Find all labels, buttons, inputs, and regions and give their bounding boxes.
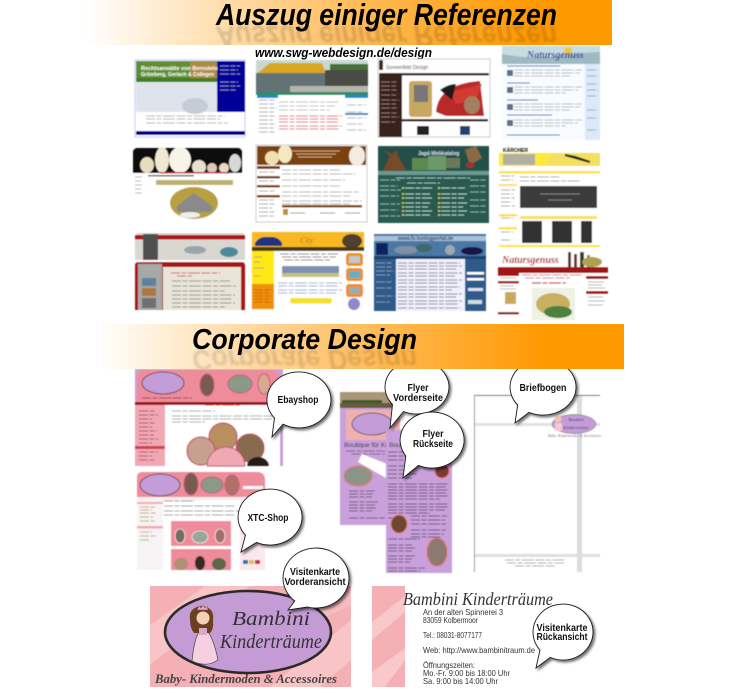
panel: Briefbogen letterhead: Baby- Kindermoden & Accessoires <box>548 434 602 438</box>
panel: business card back <box>372 586 553 687</box>
heading banner: Corporate Design <box>110 324 624 369</box>
address and opening hours: Mo.-Fr. 9:00 bis 18:00 Uhr <box>423 668 510 678</box>
screenshot: law firm site <box>135 60 245 137</box>
panel: flyer front side: Boutique für Kinder <box>344 442 400 449</box>
panel: Briefbogen letterhead: Bambini <box>568 417 584 422</box>
screenshot: design shop with phone and feathers: Sonnenfeld Design <box>386 65 428 71</box>
screenshot: blue tuning portal <box>374 234 486 311</box>
tagline: Baby- Kindermoden & Accessoires <box>154 671 337 686</box>
callout: Flyer Rückseite <box>400 412 464 478</box>
address and opening hours: Tel.: 08031-8077177 <box>423 630 482 640</box>
address and opening hours: Web: http://www.bambinitraum.de <box>423 645 535 655</box>
screenshot: Natursgenuss red shop <box>498 250 608 320</box>
screenshot: Natursgenuss blog: Natursgenuss <box>526 50 584 61</box>
callout: XTC-Shop <box>238 489 302 552</box>
panel: flyer front side <box>340 392 400 525</box>
logo text <box>219 608 322 653</box>
card name: Bambini Kinderträume <box>403 589 553 609</box>
panel: XTC-Shop screenshot <box>137 472 265 570</box>
screenshot: yellow holiday site: City <box>300 236 314 245</box>
callout: Visitenkarte Vorderansicht <box>283 548 349 610</box>
reference screenshots grid <box>133 46 608 320</box>
header banner: Auszug einiger Referenzen: Auszug einiger Referenzen <box>215 19 557 54</box>
logo text: Bambini <box>232 608 310 630</box>
screenshot: Natursgenuss blog <box>502 46 600 140</box>
address and opening hours <box>423 607 535 686</box>
panel: flyer back side <box>386 430 452 573</box>
screenshot: design shop with phone and feathers <box>378 59 490 137</box>
callout: Flyer Vorderseite <box>385 360 449 428</box>
heading text: Corporate Design <box>192 324 417 356</box>
callout: Ebayshop <box>267 372 331 437</box>
panel: Ebayshop screenshot <box>135 369 283 466</box>
screenshot: dog breeder with black header <box>133 147 242 223</box>
screenshot: Natursgenuss red shop: Natursgenuss <box>501 255 559 266</box>
callout: Flyer Vorderseite: Flyer <box>408 382 428 394</box>
panel: Briefbogen letterhead: Kinderträume <box>562 425 589 430</box>
panel: business card front <box>150 586 351 687</box>
callout: Flyer Rückseite: Rückseite <box>413 438 453 450</box>
icon: princess girl <box>190 605 218 664</box>
screenshot: law firm site: Rechtsanwälte von Bernstein <box>141 66 218 72</box>
address and opening hours: Öffnungszeiten: <box>423 660 475 670</box>
address and opening hours: 83059 Kolbermoor <box>423 615 478 625</box>
screenshot: dog breeder with brown header <box>256 145 367 222</box>
infographic page <box>98 0 624 687</box>
callout: Visitenkarte Rückansicht: Rückansicht <box>536 631 588 643</box>
callout: Flyer Rückseite: Flyer <box>422 428 444 440</box>
header banner: Auszug einiger Referenzen <box>98 0 612 45</box>
screenshot: hunting site green <box>378 146 489 223</box>
callout: XTC-Shop: XTC-Shop <box>248 512 288 524</box>
address and opening hours: Sa. 9:00 bis 14:00 Uhr <box>423 676 498 686</box>
website url: www.swg-webdesign.de/design <box>255 46 432 60</box>
address and opening hours: An der alten Spinnerei 3 <box>423 607 503 617</box>
screenshot: company site with building <box>256 60 368 137</box>
heading banner: Corporate Design: Corporate Design <box>192 343 417 375</box>
screenshot: Kärcher shop <box>499 147 600 247</box>
screenshot: law firm site: Grömberg, Gerlach & Collegen <box>141 72 214 78</box>
callout: Briefbogen <box>510 359 576 423</box>
screenshot: Kärcher shop: KÄRCHER <box>503 147 528 154</box>
logo text: Kinderträume <box>219 631 322 653</box>
screenshot: hunting site green: Jagd-Webkatalog <box>418 151 459 157</box>
callout: Visitenkarte Rückansicht: Visitenkarte <box>536 622 588 634</box>
logo oval <box>165 591 331 673</box>
callout: Ebayshop: Ebayshop <box>278 394 318 406</box>
screenshot: yellow holiday site <box>252 232 364 310</box>
panel: Briefbogen letterhead <box>474 395 602 572</box>
callout: Visitenkarte Vorderansicht: Visitenkarte <box>290 566 340 578</box>
panel: flyer back side: Boutique für Kinder <box>389 442 445 449</box>
callout: Flyer Vorderseite: Vorderseite <box>393 392 443 404</box>
callout: Briefbogen: Briefbogen <box>520 382 566 394</box>
callout: Visitenkarte Rückansicht <box>533 604 593 668</box>
screenshot: bathroom site with red frame <box>135 233 245 310</box>
callout: Visitenkarte Vorderansicht: Vorderansicht <box>284 576 346 588</box>
screenshot: blue tuning portal: www.fs-tuningportal.de <box>397 236 454 242</box>
